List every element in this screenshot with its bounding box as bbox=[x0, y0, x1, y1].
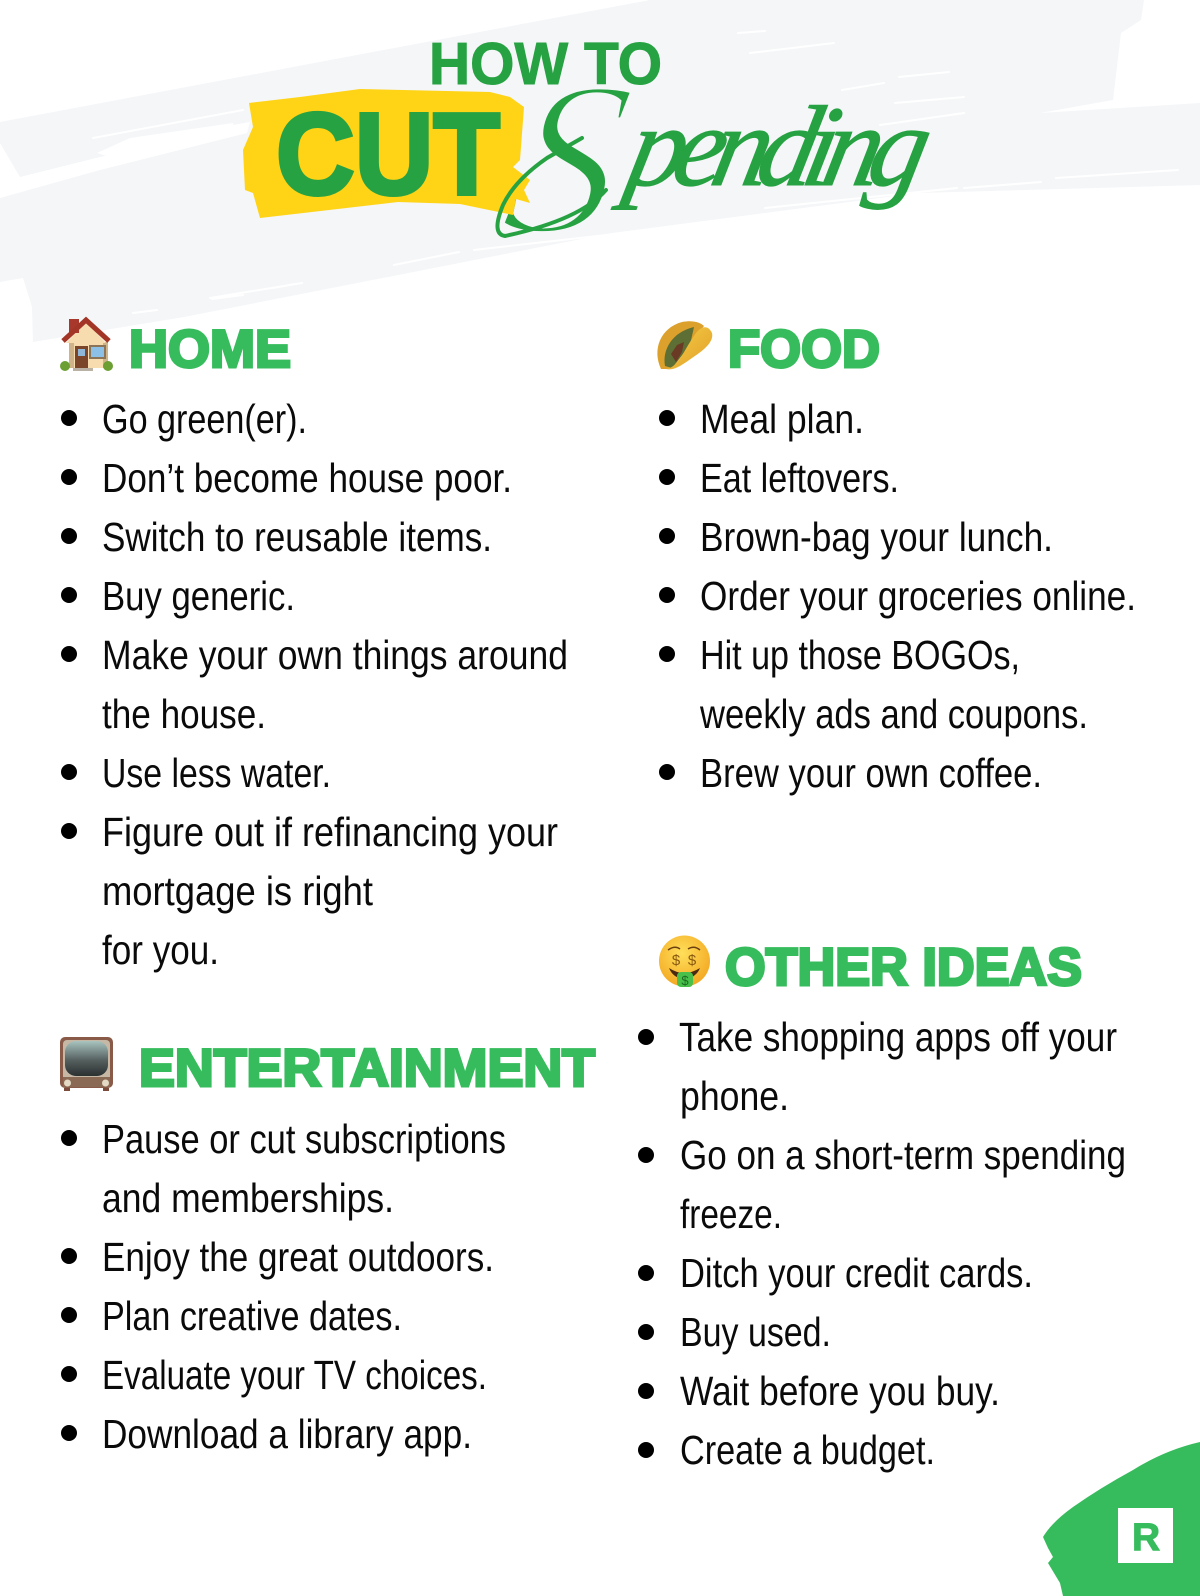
bullet list: other ideas: phone. bbox=[680, 1073, 789, 1119]
heading: cut: CUT bbox=[276, 89, 500, 219]
panel: other ideas bbox=[638, 936, 1126, 1473]
bullet list: entertainment: Enjoy the great outdoors. bbox=[102, 1234, 494, 1280]
corner logo bbox=[1043, 1442, 1200, 1596]
icon: money-mouth face: $ bbox=[688, 952, 697, 969]
bullet list: other ideas bbox=[638, 1014, 1126, 1473]
bullet list: food: Meal plan. bbox=[700, 396, 864, 442]
bullet list: home: Switch to reusable items. bbox=[102, 514, 492, 560]
bullet list: food: Brown-bag your lunch. bbox=[700, 514, 1053, 560]
script heading: spending: pending bbox=[611, 83, 940, 211]
bullet list: home: for you. bbox=[102, 927, 219, 973]
heading: how to: HOW TO bbox=[429, 31, 662, 97]
bullet list: home: Go green(er). bbox=[102, 396, 307, 442]
corner logo: R bbox=[1132, 1516, 1160, 1559]
bullet list: food: Eat leftovers. bbox=[700, 455, 899, 501]
background brush strokes bbox=[0, 0, 1200, 342]
bullet list: other ideas: Take shopping apps off your bbox=[679, 1014, 1117, 1060]
script heading: spending: S bbox=[487, 37, 648, 280]
panel: food bbox=[657, 320, 1136, 796]
bullet list: food bbox=[659, 396, 1136, 796]
bullet list: other ideas: Create a budget. bbox=[680, 1427, 935, 1473]
bullet list: home bbox=[61, 396, 568, 973]
bullet list: home: Don’t become house poor. bbox=[102, 455, 512, 501]
icon: house bbox=[60, 319, 113, 371]
bullet list: other ideas: Go on a short-term spending bbox=[680, 1132, 1126, 1178]
heading: other ideas: OTHER IDEAS bbox=[725, 938, 1082, 997]
bullet list: entertainment: and memberships. bbox=[102, 1175, 394, 1221]
panel: entertainment bbox=[60, 1037, 595, 1457]
bullet list: entertainment: Pause or cut subscriptions bbox=[102, 1116, 506, 1162]
bullet list: home: Make your own things around bbox=[102, 632, 568, 678]
bullet list: other ideas: Wait before you buy. bbox=[680, 1368, 1000, 1414]
bullet list: home: Buy generic. bbox=[102, 573, 295, 619]
bullet list: home: mortgage is right bbox=[102, 868, 374, 914]
bullet list: food: Brew your own coffee. bbox=[700, 750, 1042, 796]
bullet list: entertainment: Plan creative dates. bbox=[102, 1293, 402, 1339]
bullet list: home: Use less water. bbox=[102, 750, 331, 796]
icon: taco bbox=[657, 321, 712, 369]
bullet list: entertainment bbox=[61, 1116, 506, 1457]
panel: home bbox=[60, 319, 568, 973]
bullet list: entertainment: Download a library app. bbox=[102, 1411, 472, 1457]
bullet list: food: weekly ads and coupons. bbox=[699, 691, 1088, 737]
bullet list: other ideas: Buy used. bbox=[680, 1309, 831, 1355]
icon: money-mouth face bbox=[659, 936, 710, 988]
yellow brush patch bbox=[243, 89, 530, 218]
icon: money-mouth face: $ bbox=[672, 952, 681, 969]
bullet list: food: Hit up those BOGOs, bbox=[700, 632, 1020, 678]
icon: television bbox=[60, 1037, 113, 1091]
bullet list: other ideas: Ditch your credit cards. bbox=[680, 1250, 1033, 1296]
bullet list: home: Figure out if refinancing your bbox=[102, 809, 558, 855]
bullet list: home: the house. bbox=[102, 691, 266, 737]
flourish: script swash bbox=[497, 138, 606, 236]
icon: money-mouth face: $ bbox=[681, 973, 689, 988]
heading: entertainment: ENTERTAINMENT bbox=[139, 1039, 595, 1098]
bullet list: other ideas: freeze. bbox=[680, 1191, 782, 1237]
heading: home: HOME bbox=[129, 320, 291, 379]
bullet list: entertainment: Evaluate your TV choices. bbox=[102, 1352, 487, 1398]
heading: food: FOOD bbox=[728, 320, 880, 379]
bullet list: food: Order your groceries online. bbox=[700, 573, 1136, 619]
title: how to cut spending bbox=[243, 31, 950, 280]
